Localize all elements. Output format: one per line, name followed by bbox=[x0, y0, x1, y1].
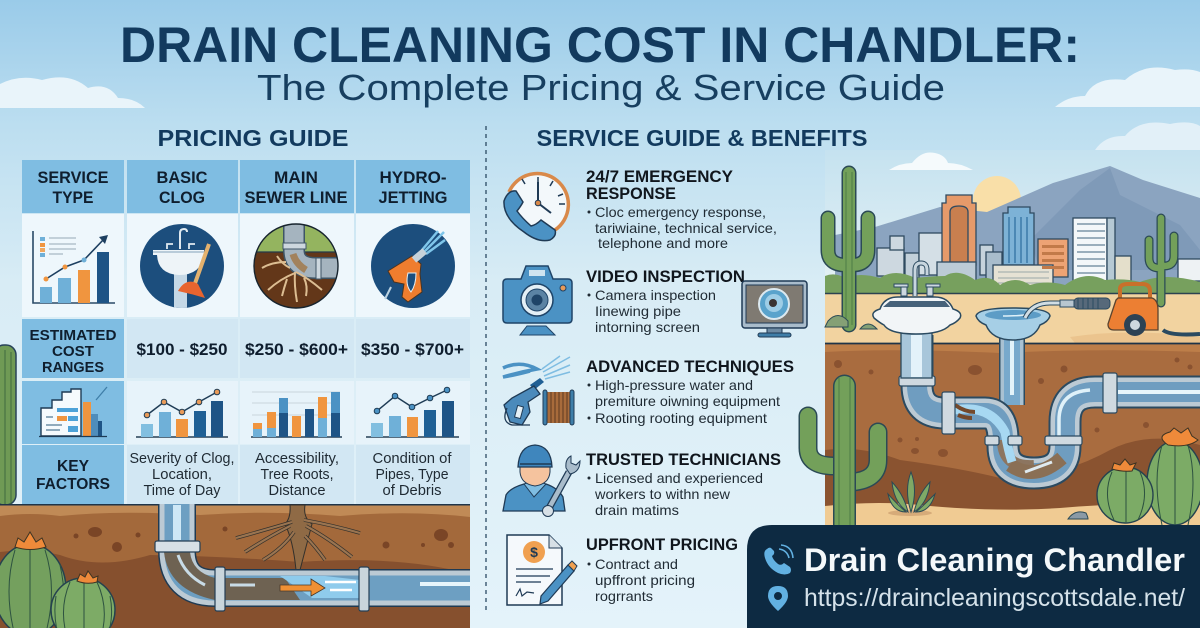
icon: contract document and pen bbox=[507, 535, 577, 605]
chart: basic clog bbox=[136, 389, 228, 437]
table row: key factors: Location, bbox=[152, 467, 212, 483]
service: trusted technicians bbox=[503, 445, 781, 518]
desert ground bbox=[825, 293, 1200, 344]
subtitle: The Complete Pricing & Service Guide bbox=[257, 67, 945, 108]
body text: Licensed and experienced bbox=[595, 470, 763, 486]
body text: Iinewing pipe bbox=[595, 303, 681, 319]
green shrubs bbox=[825, 273, 1200, 294]
title: DRAIN CLEANING COST IN CHANDLER: bbox=[120, 17, 1080, 73]
body text: Cloc emergency response, bbox=[595, 204, 766, 220]
icon: inspection monitor bbox=[742, 281, 807, 337]
sewer pipe with clog bbox=[155, 500, 475, 611]
scene: underground pipe with roots and cacti bbox=[0, 500, 475, 628]
pedestal sink bbox=[873, 263, 961, 378]
icon: hydro-jetting gun bbox=[371, 224, 455, 308]
icon: phone bbox=[764, 545, 793, 574]
small saguaro bbox=[1149, 218, 1174, 303]
cloud: top left bbox=[0, 77, 145, 108]
table row: key factors: Time of Day bbox=[144, 483, 221, 499]
heading: 24/7 EMERGENCY bbox=[586, 167, 734, 186]
website url: https://draincleaningscottsdale.net/ bbox=[804, 584, 1185, 612]
icon: camera bbox=[503, 266, 572, 335]
body text bbox=[588, 556, 695, 604]
body text: telephone and more bbox=[598, 235, 728, 251]
body text bbox=[588, 377, 780, 426]
body text: Camera inspection bbox=[595, 287, 716, 303]
table row: header: HYDRO- bbox=[380, 169, 446, 187]
table row: key factors bbox=[22, 445, 470, 504]
icon: location pin bbox=[768, 586, 788, 611]
body text: rogrrants bbox=[595, 588, 653, 604]
heading: service guide and benefits: SERVICE GUIDE & BENEFITS bbox=[536, 125, 868, 151]
heading: UPFRONT PRICING bbox=[586, 535, 738, 554]
heading: TRUSTED TECHNICIANS bbox=[586, 450, 781, 469]
chart: hydro-jetting bbox=[366, 387, 459, 437]
body text: Contract and bbox=[595, 556, 678, 572]
table row: key factors: Accessibility, bbox=[255, 451, 339, 467]
table row: key factors: Pipes, Type bbox=[376, 467, 448, 483]
flow arrow bbox=[280, 579, 325, 596]
callout: business name and website bbox=[747, 525, 1200, 628]
table row: key factors: Severity of Clog, bbox=[130, 451, 234, 467]
table row: estimated cost ranges: $100 - $250 bbox=[136, 341, 228, 359]
body text bbox=[588, 470, 763, 518]
heading: ADVANCED TECHNIQUES bbox=[586, 357, 794, 376]
water basin bbox=[976, 308, 1050, 340]
table row: key factors: Distance bbox=[268, 483, 326, 499]
table row: header: JETTING bbox=[378, 189, 448, 207]
sun bbox=[973, 176, 1021, 212]
body text: intorning screen bbox=[595, 319, 700, 335]
left saguaro cactus bbox=[0, 345, 16, 505]
icon: sink and plunger bbox=[140, 224, 224, 312]
body text: tariwiaine, technical service, bbox=[595, 220, 777, 236]
soil layers bbox=[825, 350, 1200, 478]
scene: desert city and plumbing bbox=[808, 150, 1200, 535]
body text: High-pressure water and bbox=[595, 377, 753, 393]
icon: contract document and pen: $ bbox=[530, 544, 538, 560]
heading: pricing guide: PRICING GUIDE bbox=[158, 125, 348, 151]
body text: premiture oiwning equipment bbox=[595, 393, 780, 409]
icon: jet nozzle, gun and reel bbox=[503, 356, 574, 425]
service: 24/7 emergency response bbox=[504, 167, 777, 251]
icon: technician with wrench bbox=[503, 445, 580, 516]
city skyline bbox=[877, 195, 1200, 288]
panel: pricing table bbox=[22, 160, 470, 504]
table row: estimated cost ranges bbox=[22, 319, 470, 378]
foreground saguaro bbox=[808, 378, 878, 535]
body text bbox=[588, 287, 716, 335]
table row: estimated cost ranges: COST bbox=[52, 344, 94, 360]
table row: header: CLOG bbox=[159, 189, 205, 207]
chart: main sewer line bbox=[251, 392, 342, 437]
mountains bbox=[835, 166, 1200, 290]
table row: key factors: of Debris bbox=[382, 483, 442, 499]
body text: workers to withn new bbox=[594, 486, 731, 502]
table row: key factors: Tree Roots, bbox=[260, 467, 334, 483]
table row: estimated cost ranges: $250 - $600+ bbox=[245, 341, 348, 359]
icon: price document chart bbox=[39, 387, 107, 436]
table row: header: TYPE bbox=[52, 189, 94, 207]
table row: estimated cost ranges: $350 - $700+ bbox=[361, 341, 464, 359]
cloud: top right bbox=[1055, 68, 1200, 107]
icon: clock and phone bbox=[504, 172, 569, 241]
heading: VIDEO INSPECTION bbox=[586, 267, 745, 286]
cloud in scene bbox=[889, 152, 973, 170]
tree roots bbox=[236, 505, 360, 570]
body text: upffront pricing bbox=[595, 572, 695, 588]
plumbing pipes and trap bbox=[917, 335, 1200, 473]
body text bbox=[588, 204, 777, 251]
service: video inspection bbox=[503, 266, 807, 337]
table row: key factors: Condition of bbox=[372, 451, 452, 467]
big saguaro bbox=[825, 172, 877, 329]
icon: service chart bbox=[33, 231, 115, 303]
cloud: right lower bbox=[1095, 122, 1200, 150]
table row: estimated cost ranges: RANGES bbox=[42, 360, 104, 376]
table row: icons bbox=[22, 214, 470, 317]
rock bbox=[1068, 512, 1088, 519]
table row: estimated cost ranges: ESTIMATED bbox=[30, 328, 117, 344]
barrel cacti right bbox=[1097, 428, 1200, 525]
agave plant bbox=[888, 472, 935, 516]
service: advanced techniques bbox=[503, 356, 794, 426]
service: 24/7 emergency response: RESPONSE bbox=[586, 184, 676, 203]
barrel cacti bbox=[0, 532, 115, 628]
table row: header: SERVICE bbox=[38, 169, 108, 187]
table row: charts bbox=[22, 381, 470, 444]
pipe flanges bbox=[899, 373, 1117, 445]
table row: header: MAIN bbox=[274, 169, 318, 187]
table row: header bbox=[22, 160, 470, 213]
icon: sewer pipe and roots bbox=[254, 222, 340, 308]
service: upfront pricing bbox=[507, 535, 738, 605]
table row: key factors: KEY bbox=[57, 458, 89, 475]
drain cleaning machine with hose bbox=[1025, 284, 1200, 336]
body text: drain matims bbox=[595, 502, 679, 518]
table row: header: BASIC bbox=[156, 169, 208, 187]
body text: Rooting rooting equipment bbox=[595, 410, 767, 426]
table row: key factors: FACTORS bbox=[36, 476, 110, 493]
business name: Drain Cleaning Chandler bbox=[804, 542, 1185, 578]
table row: header: SEWER LINE bbox=[244, 189, 348, 207]
